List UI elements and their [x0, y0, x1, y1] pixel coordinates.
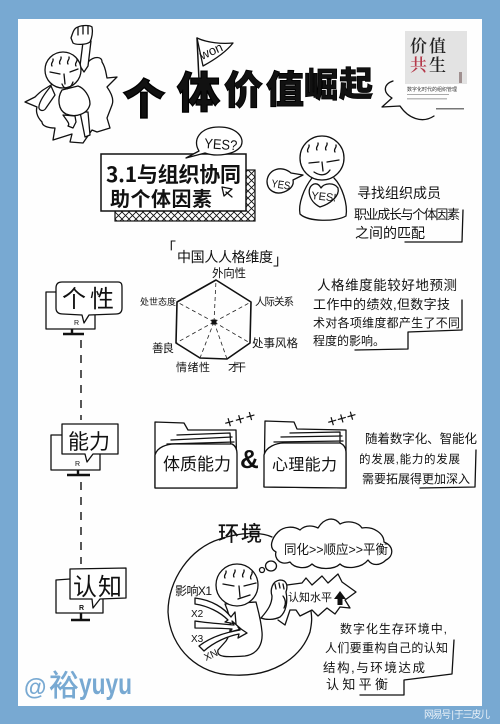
- title: 值: [266, 59, 304, 114]
- section heading box 3.1: 助个体因素: [110, 183, 212, 212]
- labels: influences: X3: [191, 634, 204, 645]
- icon: ability monitor: 能力: [68, 431, 110, 454]
- folder: physical ability: [155, 406, 258, 488]
- title: 个: [123, 66, 165, 127]
- icon: flexing arm: [261, 580, 287, 619]
- book cover: 数字化时代的组织管理: [407, 86, 457, 93]
- text block: matching note: [354, 185, 463, 242]
- folder: psychological ability: +++: [325, 405, 359, 432]
- title: 体: [177, 59, 220, 121]
- title: 价: [224, 60, 263, 116]
- text block: cognition note: 认知平衡: [326, 677, 388, 692]
- icon: figure with heart: YES!: [311, 190, 337, 205]
- text block: personality note: 人格维度能较好地预测: [317, 278, 457, 293]
- chart heading: 「: [161, 240, 176, 257]
- text block: cognition note: 结构,与环境达成: [323, 660, 425, 675]
- labels: influences: [175, 583, 220, 664]
- title: [123, 57, 373, 127]
- text block: ability note: 的发展,能力的发展: [359, 452, 460, 466]
- section heading box 3.1: 3.1与组织协同: [106, 159, 241, 189]
- icon: figure with heart: [300, 136, 346, 220]
- radar chart: personality dimensions: 外向性: [212, 266, 246, 280]
- radar chart: personality dimensions: [140, 266, 298, 374]
- labels: influences: X2: [191, 609, 204, 620]
- text block: ability note: [359, 431, 477, 488]
- title: 崛: [304, 58, 338, 107]
- section heading box 3.1: [101, 154, 255, 221]
- radar chart: personality dimensions: 情绪性: [176, 360, 210, 374]
- icon: cheering figure with burst: [25, 26, 117, 143]
- folder: psychological ability: [264, 405, 359, 488]
- icon: won flag: won: [196, 39, 225, 63]
- burst: cognitive level up: 认知水平: [288, 590, 332, 604]
- decorative title swoosh: [382, 81, 434, 120]
- speech bubble: YES?: [186, 127, 242, 158]
- chart heading: [161, 240, 288, 269]
- book cover: 值: [429, 32, 446, 57]
- radar chart: personality dimensions: 善良: [152, 341, 174, 355]
- arrows: influences on figure: [195, 598, 247, 651]
- folder: physical ability: +++: [222, 406, 258, 433]
- icon: personality monitor: 个性: [62, 286, 114, 313]
- text block: ability note: 需要拓展得更加深入: [362, 471, 470, 486]
- text block: cognition note: 数字化生存环境中,: [340, 621, 447, 636]
- text block: matching note: 职业成长与个体因素: [354, 207, 460, 222]
- watermark: author handle: [24, 661, 132, 705]
- dashed connector: personality to ability: [80, 340, 82, 420]
- text block: personality note: 程度的影响。: [313, 333, 385, 348]
- burst: cognitive level up: [278, 574, 356, 625]
- text block: personality note: 术对各项维度都产生了不同: [313, 315, 460, 330]
- icon: personality monitor: [46, 282, 122, 334]
- text block: personality note: [313, 278, 462, 350]
- watermark: author handle: 裕: [49, 661, 79, 705]
- text block: personality note: 工作中的绩效,但数字技: [313, 297, 450, 312]
- text block: matching note: 之间的匹配: [355, 225, 425, 241]
- thought cloud: assimilation to balance: [260, 519, 392, 572]
- text block: cognition note: [323, 621, 454, 695]
- chart heading: 」: [273, 252, 288, 269]
- icon: ability monitor: R: [75, 461, 80, 468]
- labels: influences: 影响X1: [175, 583, 212, 598]
- radar chart: personality dimensions: 人际关系: [255, 295, 294, 308]
- heading: environment: 环境: [218, 523, 262, 546]
- icon: cognition monitor: R: [79, 605, 84, 612]
- icon: cognition monitor: [56, 568, 126, 620]
- ampersand: &: [240, 444, 259, 474]
- book cover: 共: [410, 51, 427, 76]
- source credit: 网易号 | 于三皮儿: [424, 708, 490, 721]
- icon: ability monitor: [51, 424, 118, 475]
- folder: psychological ability: 心理能力: [272, 456, 337, 474]
- folder: physical ability: 体质能力: [163, 455, 231, 474]
- book cover: 生: [429, 51, 446, 76]
- icon: cognition monitor: 认知: [73, 574, 122, 601]
- book cover: 价: [410, 32, 427, 57]
- labels: influences: XN: [203, 648, 220, 664]
- icon: personality monitor: R: [74, 320, 79, 327]
- thought cloud: assimilation to balance: 同化>>顺应>>平衡: [284, 542, 388, 557]
- speech bubble: YES?: YES?: [204, 135, 238, 153]
- text block: cognition note: 人们要重构自己的认知: [325, 640, 448, 655]
- book cover: [405, 31, 467, 110]
- text block: matching note: 寻找组织成员: [357, 185, 441, 201]
- radar chart: personality dimensions: 处世态度: [140, 296, 176, 307]
- dashed connector: ability to cognition: [80, 482, 82, 564]
- chart heading: 中国人人格维度: [177, 249, 273, 265]
- radar chart: personality dimensions: 处事风格: [252, 336, 298, 350]
- speech bubble: YES: [267, 169, 303, 193]
- text block: ability note: 随着数字化、智能化: [365, 431, 477, 446]
- radar chart: personality dimensions: 才干: [228, 360, 246, 374]
- speech bubble: YES: YES: [271, 178, 291, 193]
- watermark: author handle: @: [24, 674, 46, 700]
- title: 起: [339, 57, 373, 106]
- environment circle with figure: [168, 533, 312, 675]
- watermark: author handle: yuyu: [79, 668, 132, 701]
- icon: won flag: [196, 38, 233, 80]
